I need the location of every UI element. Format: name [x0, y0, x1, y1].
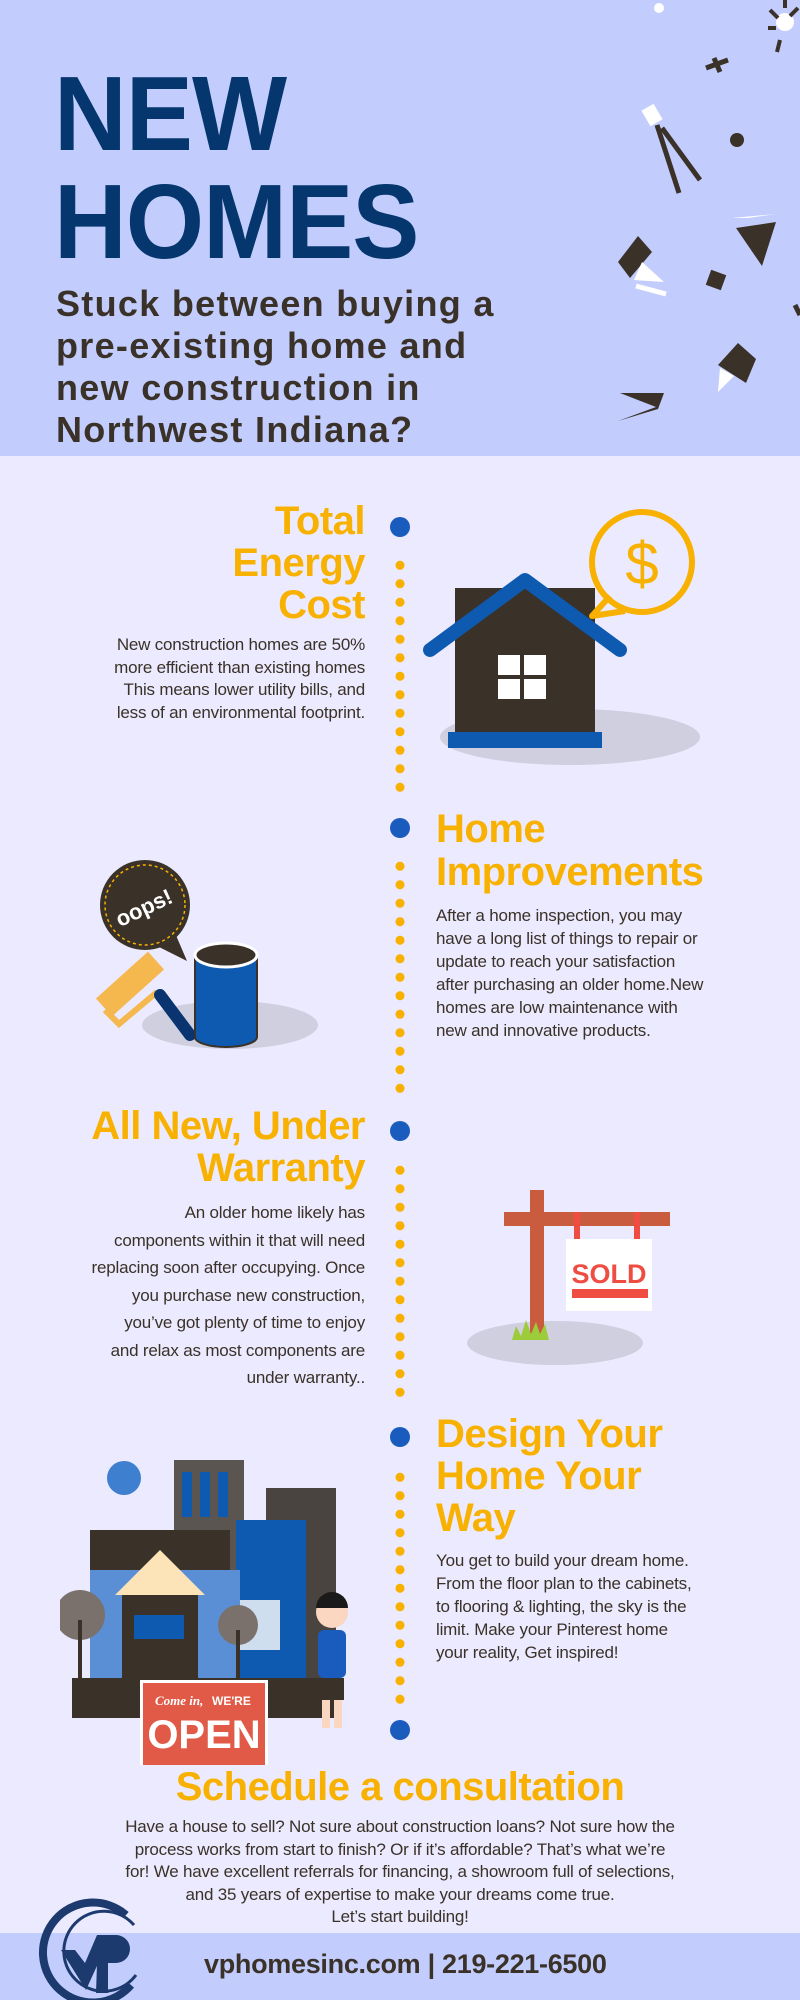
text: replacing soon after occupying. Once [92, 1258, 365, 1277]
icon: city with open sign: OPEN [147, 1713, 261, 1757]
subtitle: pre-existing home and [56, 325, 467, 366]
text: You get to build your dream home. [436, 1551, 689, 1570]
text [114, 635, 365, 722]
heading [436, 807, 703, 894]
heading: Way [436, 1496, 515, 1540]
footer [0, 1933, 800, 2000]
section: all new under warranty [91, 1104, 366, 1387]
text: have a long list of things to repair or [436, 929, 698, 948]
text: After a home inspection, you may [436, 906, 682, 925]
icon: sold sign [467, 1190, 670, 1365]
text [436, 1551, 692, 1662]
icon: paint roller oops [96, 860, 318, 1049]
heading [232, 499, 366, 627]
text: and relax as most components are [111, 1340, 365, 1360]
heading: Home Your [436, 1454, 641, 1498]
text: less of an environmental footprint. [117, 702, 365, 722]
heading: Cost [278, 583, 365, 627]
text: consultation: for! We have excellent referrals for financing, a showroom full of selections, [125, 1862, 675, 1881]
text [92, 1203, 366, 1387]
text: consultation: Have a house to sell? Not sure about construction loans? Not sure how the [125, 1817, 675, 1836]
text: limit. Make your Pinterest home [436, 1620, 668, 1639]
text: new and innovative products. [436, 1021, 651, 1040]
heading: Energy [232, 541, 365, 585]
text: consultation: Let’s start building! [331, 1907, 469, 1926]
text: update to reach your satisfaction [436, 952, 675, 971]
heading [436, 1412, 662, 1540]
heading: Improvements [436, 850, 703, 894]
text: your reality, Get inspired! [436, 1643, 618, 1662]
title: NEW [54, 55, 286, 173]
heading: All New, Under [91, 1104, 365, 1148]
icon: house with dollar bubble: $ [625, 530, 659, 597]
text: This means lower utility bills, and [124, 680, 365, 699]
text: consultation [125, 1817, 675, 1926]
text: From the floor plan to the cabinets, [436, 1574, 692, 1593]
text [436, 906, 704, 1040]
icon: house with dollar bubble [423, 509, 700, 765]
decorative confetti [618, 0, 800, 421]
text: New construction homes are 50% [117, 635, 365, 654]
icon: city with open sign: Come in, [155, 1693, 203, 1708]
text: you purchase new construction, [132, 1286, 365, 1304]
heading: Warranty [197, 1146, 365, 1190]
text: under warranty.. [247, 1368, 365, 1387]
header band [0, 0, 800, 456]
text: you’ve got plenty of time to enjoy [124, 1313, 365, 1332]
text: more efficient than existing homes [114, 658, 365, 676]
subtitle [56, 283, 495, 450]
text: after purchasing an older home.New [436, 975, 703, 994]
subtitle: Northwest Indiana? [56, 409, 413, 450]
subtitle: new construction in [56, 367, 421, 408]
section: total energy cost [114, 499, 366, 722]
heading [91, 1104, 366, 1190]
icon: paint roller oops: oops! [112, 884, 176, 932]
heading: Total [275, 499, 365, 543]
text: components within it that will need [114, 1230, 365, 1250]
heading: schedule a consultation: Schedule a consultation [176, 1765, 624, 1809]
heading: Design Your [436, 1412, 662, 1456]
heading: Home [436, 807, 545, 851]
icon: city with open sign: WE'RE [212, 1694, 251, 1708]
icon: sold sign: SOLD [571, 1259, 647, 1289]
text: An older home likely has [185, 1203, 365, 1222]
icon: city with open sign [60, 1460, 348, 1765]
section: home improvements [436, 807, 704, 1040]
section: design your home [436, 1412, 692, 1662]
text: consultation: process works from start to finish? Or if it’s affordable? That’s what we’re [135, 1840, 665, 1858]
subtitle: Stuck between buying a [56, 283, 495, 324]
contact text: vphomesinc.com | 219-221-6500 [204, 1949, 607, 1979]
text: homes are low maintenance with [436, 998, 678, 1017]
logo [38, 1898, 138, 2000]
title [54, 55, 419, 281]
title: HOMES [54, 163, 419, 281]
text: to flooring & lighting, the sky is the [436, 1597, 686, 1616]
text: consultation: and 35 years of expertise to make your dreams come true. [185, 1884, 615, 1904]
